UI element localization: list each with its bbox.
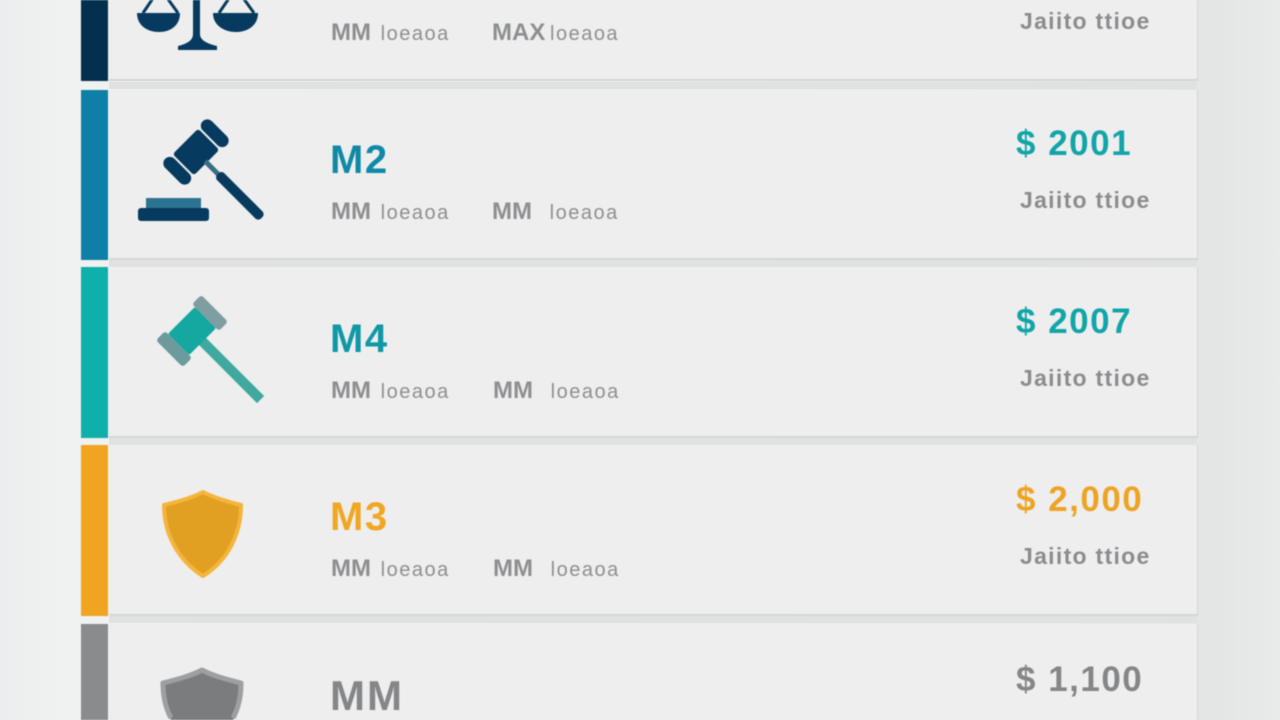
row 5: MM: [80, 623, 1198, 720]
card: [109, 624, 1198, 720]
card: [109, 90, 1198, 260]
row 2: M2: [80, 89, 1198, 261]
sublabel: right: MM loeaoa: [492, 198, 619, 225]
icon: gavel: [137, 118, 264, 222]
color bar: [81, 90, 108, 260]
icon: gold shield: [161, 489, 244, 579]
sublabel: left: MM loeaoa: [331, 555, 450, 582]
color bar: [81, 624, 108, 720]
card: [109, 267, 1198, 438]
card: [109, 445, 1198, 616]
sublabel: left: MM loeaoa: [331, 377, 450, 404]
color bar: [81, 445, 108, 616]
title: M4: [330, 317, 389, 361]
sublabel: left: MM loeaoa: [331, 19, 450, 46]
icon: scales of justice: [136, 0, 259, 51]
note: Jaiito ttioe: [1020, 365, 1151, 391]
note: Jaiito ttioe: [1020, 187, 1151, 213]
icon: gray shield: [160, 667, 244, 720]
icon: teal gavel: [156, 296, 264, 404]
price: $ 2007: [1016, 302, 1132, 341]
sublabel: right: MM loeaoa: [493, 377, 620, 404]
note: Jaiito ttioe: [1020, 543, 1151, 569]
color bar: [81, 267, 108, 438]
note: Jaiito ttioe: [1020, 8, 1151, 34]
sublabel: right: MM loeaoa: [493, 555, 620, 582]
row 3: M4: [80, 266, 1198, 439]
price: $ 2001: [1016, 124, 1132, 163]
card: [109, 0, 1198, 81]
title: M3: [330, 495, 389, 539]
color bar: [81, 0, 108, 81]
title: MM: [330, 672, 404, 719]
price: $ 1,100: [1016, 660, 1143, 699]
row 4: M3: [80, 444, 1198, 617]
title: M2: [330, 138, 389, 182]
sublabel: left: MM loeaoa: [331, 198, 450, 225]
price: $ 2,000: [1016, 480, 1143, 519]
sublabel: right: MAX loeaoa: [492, 19, 619, 46]
row 1: scales: [80, 0, 1198, 82]
